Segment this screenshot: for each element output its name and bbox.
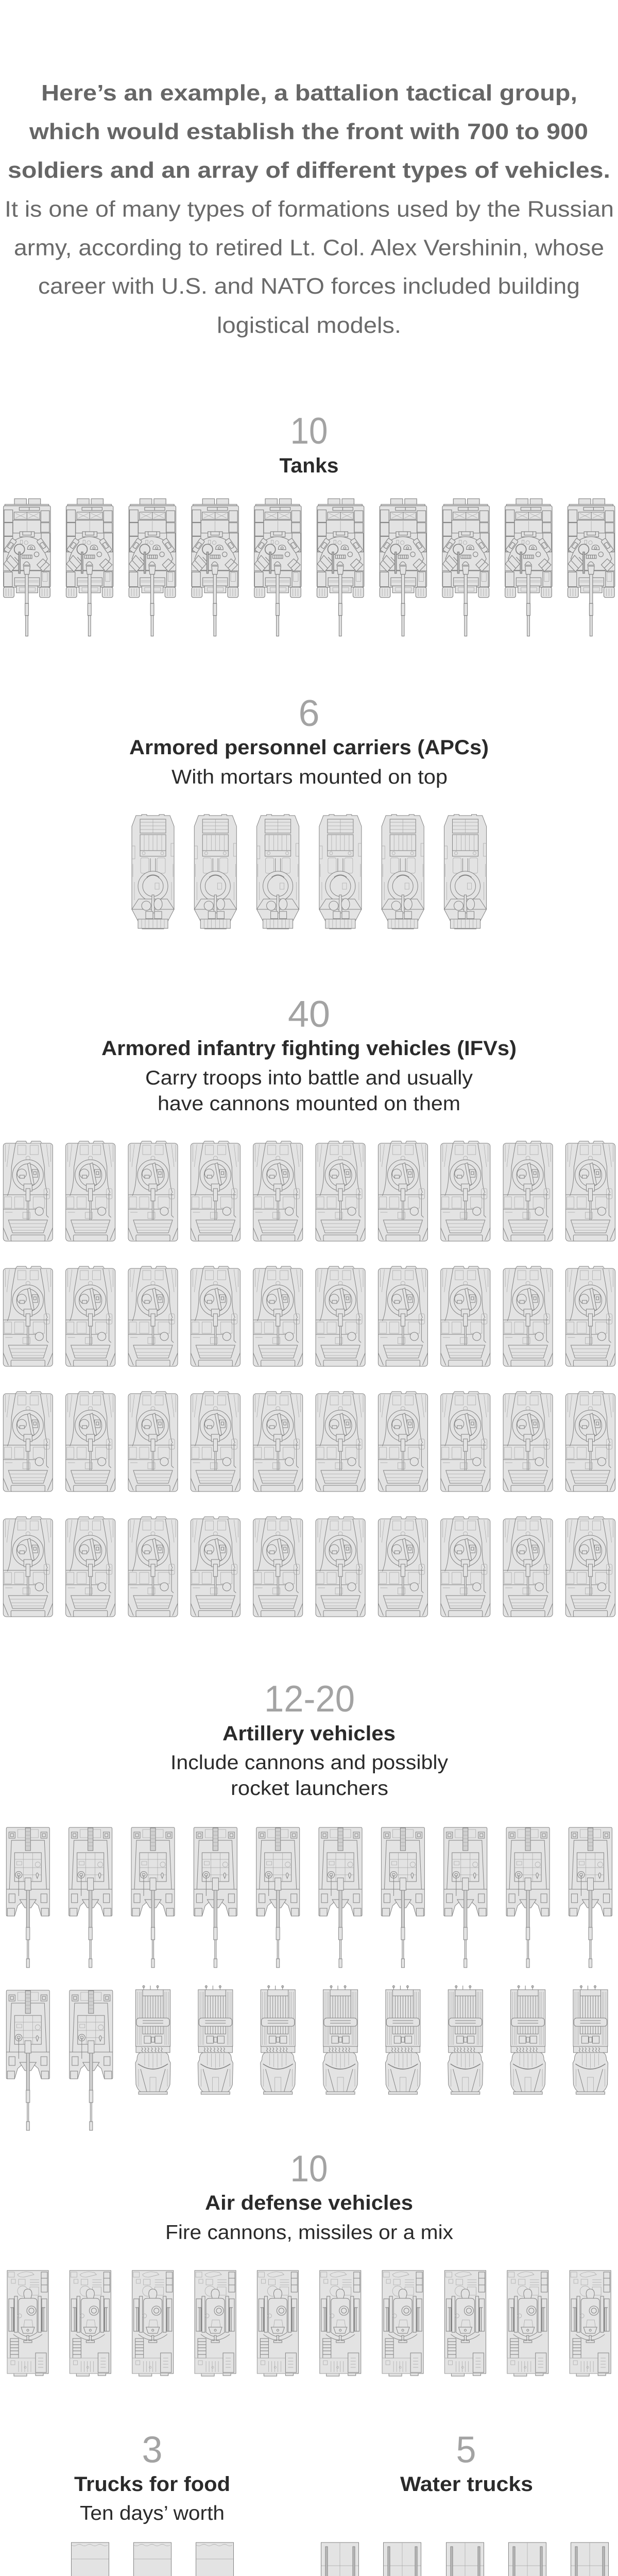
- heading: air defense: Air defense vehicles: [205, 2192, 413, 2214]
- panel: water trucks: [321, 2430, 611, 2576]
- heading: tanks: Tanks: [279, 454, 339, 477]
- description: IFVs line 1: Carry troops into battle and usually: [145, 1067, 473, 1089]
- IFV row 3: [3, 1392, 615, 1492]
- description: food trucks: Ten days’ worth: [80, 2502, 225, 2524]
- count: 5 water trucks: 5: [456, 2430, 476, 2471]
- count: 10 tanks: 10: [290, 411, 328, 452]
- count: 10 air defense: 10: [290, 2148, 328, 2190]
- intro bold line 2: which would establish the front with 700 to 900: [29, 119, 588, 144]
- count: 3 food trucks: 3: [142, 2430, 163, 2471]
- panel: armored personnel carriers: [129, 693, 489, 929]
- row of water truck icons: [321, 2543, 611, 2576]
- IFV row 1: [3, 1141, 615, 1241]
- heading: IFVs: Armored infantry fighting vehicles (IFVs): [101, 1037, 517, 1060]
- artillery row 1: [6, 1827, 612, 1968]
- description: IFVs line 2: have cannons mounted on them: [158, 1093, 460, 1115]
- artillery row 2: two cannons and eight rocket launchers: [6, 1986, 608, 2130]
- IFV row 2: [3, 1266, 615, 1366]
- intro bold line 3: soldiers and an array of different types of vehicles.: [8, 158, 610, 183]
- intro regular line 3: career with U.S. and NATO forces included building: [38, 274, 580, 299]
- row of APC icons: [132, 815, 486, 929]
- panel: tanks: [4, 411, 615, 636]
- intro bold line 1: Here’s an example, a battalion tactical group,: [41, 80, 577, 106]
- panel: trucks for food: [71, 2430, 234, 2576]
- count: 12-20 artillery: 12-20: [264, 1679, 355, 1720]
- count: 6 APCs: 6: [299, 693, 319, 734]
- intro regular line 1: It is one of many types of formations used by the Russian: [5, 197, 614, 222]
- description: APCs: With mortars mounted on top: [171, 766, 448, 788]
- heading: APCs: Armored personnel carriers (APCs): [129, 736, 489, 759]
- IFV row 4: [3, 1517, 615, 1617]
- panel: artillery vehicles: [6, 1679, 612, 2130]
- panel: armored infantry fighting vehicles: [3, 994, 615, 1617]
- description: artillery line 1: Include cannons and possibly: [170, 1752, 449, 1774]
- description: artillery line 2: rocket launchers: [231, 1777, 388, 1800]
- intro regular line 2: army, according to retired Lt. Col. Alex Vershinin, whose: [14, 235, 604, 261]
- heading: artillery: Artillery vehicles: [222, 1722, 396, 1745]
- row of food truck icons: [71, 2543, 234, 2576]
- intro regular line 4: logistical models.: [217, 313, 401, 338]
- heading: food trucks: Trucks for food: [74, 2473, 230, 2496]
- heading: water trucks: Water trucks: [400, 2473, 533, 2496]
- row of air defense icons: [7, 2270, 611, 2376]
- row of tank icons: [4, 499, 615, 636]
- panel: air defense vehicles: [7, 2148, 611, 2376]
- intro text block: [5, 80, 614, 338]
- description: air defense: Fire cannons, missiles or a mix: [165, 2222, 454, 2244]
- count: 40 IFVs: 40: [288, 994, 330, 1035]
